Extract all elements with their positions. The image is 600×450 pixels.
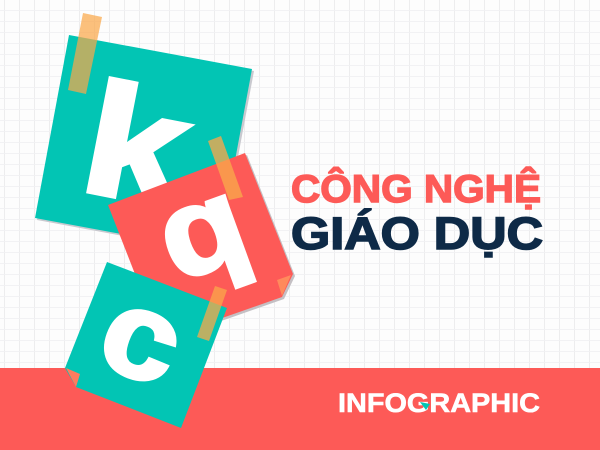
bottom band	[0, 368, 600, 450]
sticky note: c	[65, 260, 227, 428]
title line 2: GIÁO DỤC	[291, 208, 543, 259]
sticky note: q	[108, 151, 295, 340]
letter k: k	[71, 49, 203, 241]
folded corner	[277, 275, 291, 296]
tape on q note	[208, 136, 243, 200]
letter c: c	[84, 260, 201, 413]
sticky note: k	[35, 35, 254, 254]
folded corner	[66, 368, 80, 387]
tape on c note	[197, 286, 227, 341]
infographic label: INFOGRAPHIC	[338, 388, 540, 418]
title line 1: CÔNG NGHỆ	[291, 166, 541, 211]
tape on k note	[68, 13, 102, 94]
icon: teal triangle	[420, 402, 430, 410]
title	[291, 166, 543, 259]
letter q: q	[139, 151, 264, 307]
